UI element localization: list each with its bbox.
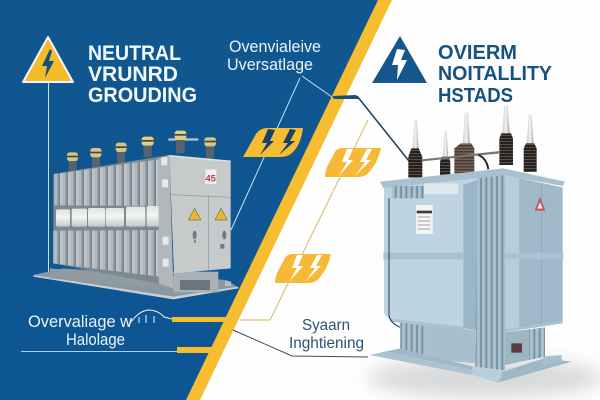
signal squiggle and upper yellow connector — [128, 310, 230, 326]
panel: blue left background — [0, 0, 379, 400]
icon: yellow warning triangle — [23, 37, 73, 82]
tank right face — [505, 175, 563, 332]
top label plate — [424, 183, 458, 194]
right transformer — [370, 106, 572, 382]
tank left face — [384, 175, 505, 333]
vent block — [392, 186, 424, 198]
left transformer — [33, 131, 238, 299]
lower yellow connector with rule — [21, 347, 215, 353]
text: bottom left label: Overvaliage w — [28, 313, 132, 331]
earth cable — [389, 198, 400, 327]
heading: right title: HSTADS — [438, 85, 513, 107]
heading: neutral grounding: NEUTRAL — [88, 42, 181, 65]
icon: blue warning triangle — [372, 36, 427, 83]
centre fin column — [475, 175, 505, 371]
bushings — [67, 131, 216, 173]
base plate — [370, 348, 572, 382]
horizontal tank bands — [383, 253, 563, 332]
text: top centre label: Ovenvialeive — [229, 37, 321, 56]
heading: right title — [438, 42, 553, 107]
white capacitor cylinders — [56, 206, 167, 227]
heading: neutral grounding — [88, 42, 197, 107]
bushings — [408, 106, 537, 178]
heading: neutral grounding: GROUDING — [88, 84, 197, 107]
shadow under right transformer — [367, 358, 600, 398]
lower radiator fins — [53, 230, 159, 277]
connector line from warning icon — [48, 83, 50, 272]
cabinet gauges — [193, 231, 226, 249]
text: bottom right label — [289, 317, 364, 352]
text: top centre label — [227, 37, 321, 74]
diagonal yellow band — [186, 0, 392, 400]
lightning band icon: dark — [243, 128, 303, 157]
lid — [380, 168, 565, 188]
red warning triangle — [535, 197, 545, 211]
right face light strip — [505, 175, 519, 332]
text: bottom left label — [28, 313, 132, 349]
tank body behind fins — [53, 155, 173, 287]
lower right wall — [505, 327, 545, 365]
side column with plates — [159, 155, 173, 288]
yellow hazard labels — [188, 208, 227, 220]
lower right fins — [529, 327, 545, 360]
data plate — [416, 205, 433, 234]
text: bottom right label: Inghtiening — [289, 335, 364, 352]
lower wall — [400, 323, 475, 363]
text: bottom left label: Halolage — [66, 331, 125, 349]
upper radiator fins — [54, 159, 159, 206]
terminal — [511, 343, 522, 353]
base platform — [33, 268, 238, 299]
lightning band icon: light lower — [275, 254, 331, 283]
shaded panel beside centre fins — [463, 180, 477, 330]
lower left fins — [401, 323, 425, 357]
connector: thin lines across the diagonal — [231, 76, 421, 357]
heading: neutral grounding: VRUNRD — [88, 63, 178, 86]
text: top centre label: Uversatlage — [227, 55, 313, 74]
text: bottom right label: Syaarn — [302, 317, 350, 334]
heading: right title: OVIERM — [438, 42, 517, 64]
front cabinet — [169, 155, 231, 273]
warning sign: red and white: 45 — [205, 173, 216, 183]
lightning band icon: light upper — [325, 148, 381, 177]
heading: right title: NOITALLITY — [438, 63, 553, 85]
